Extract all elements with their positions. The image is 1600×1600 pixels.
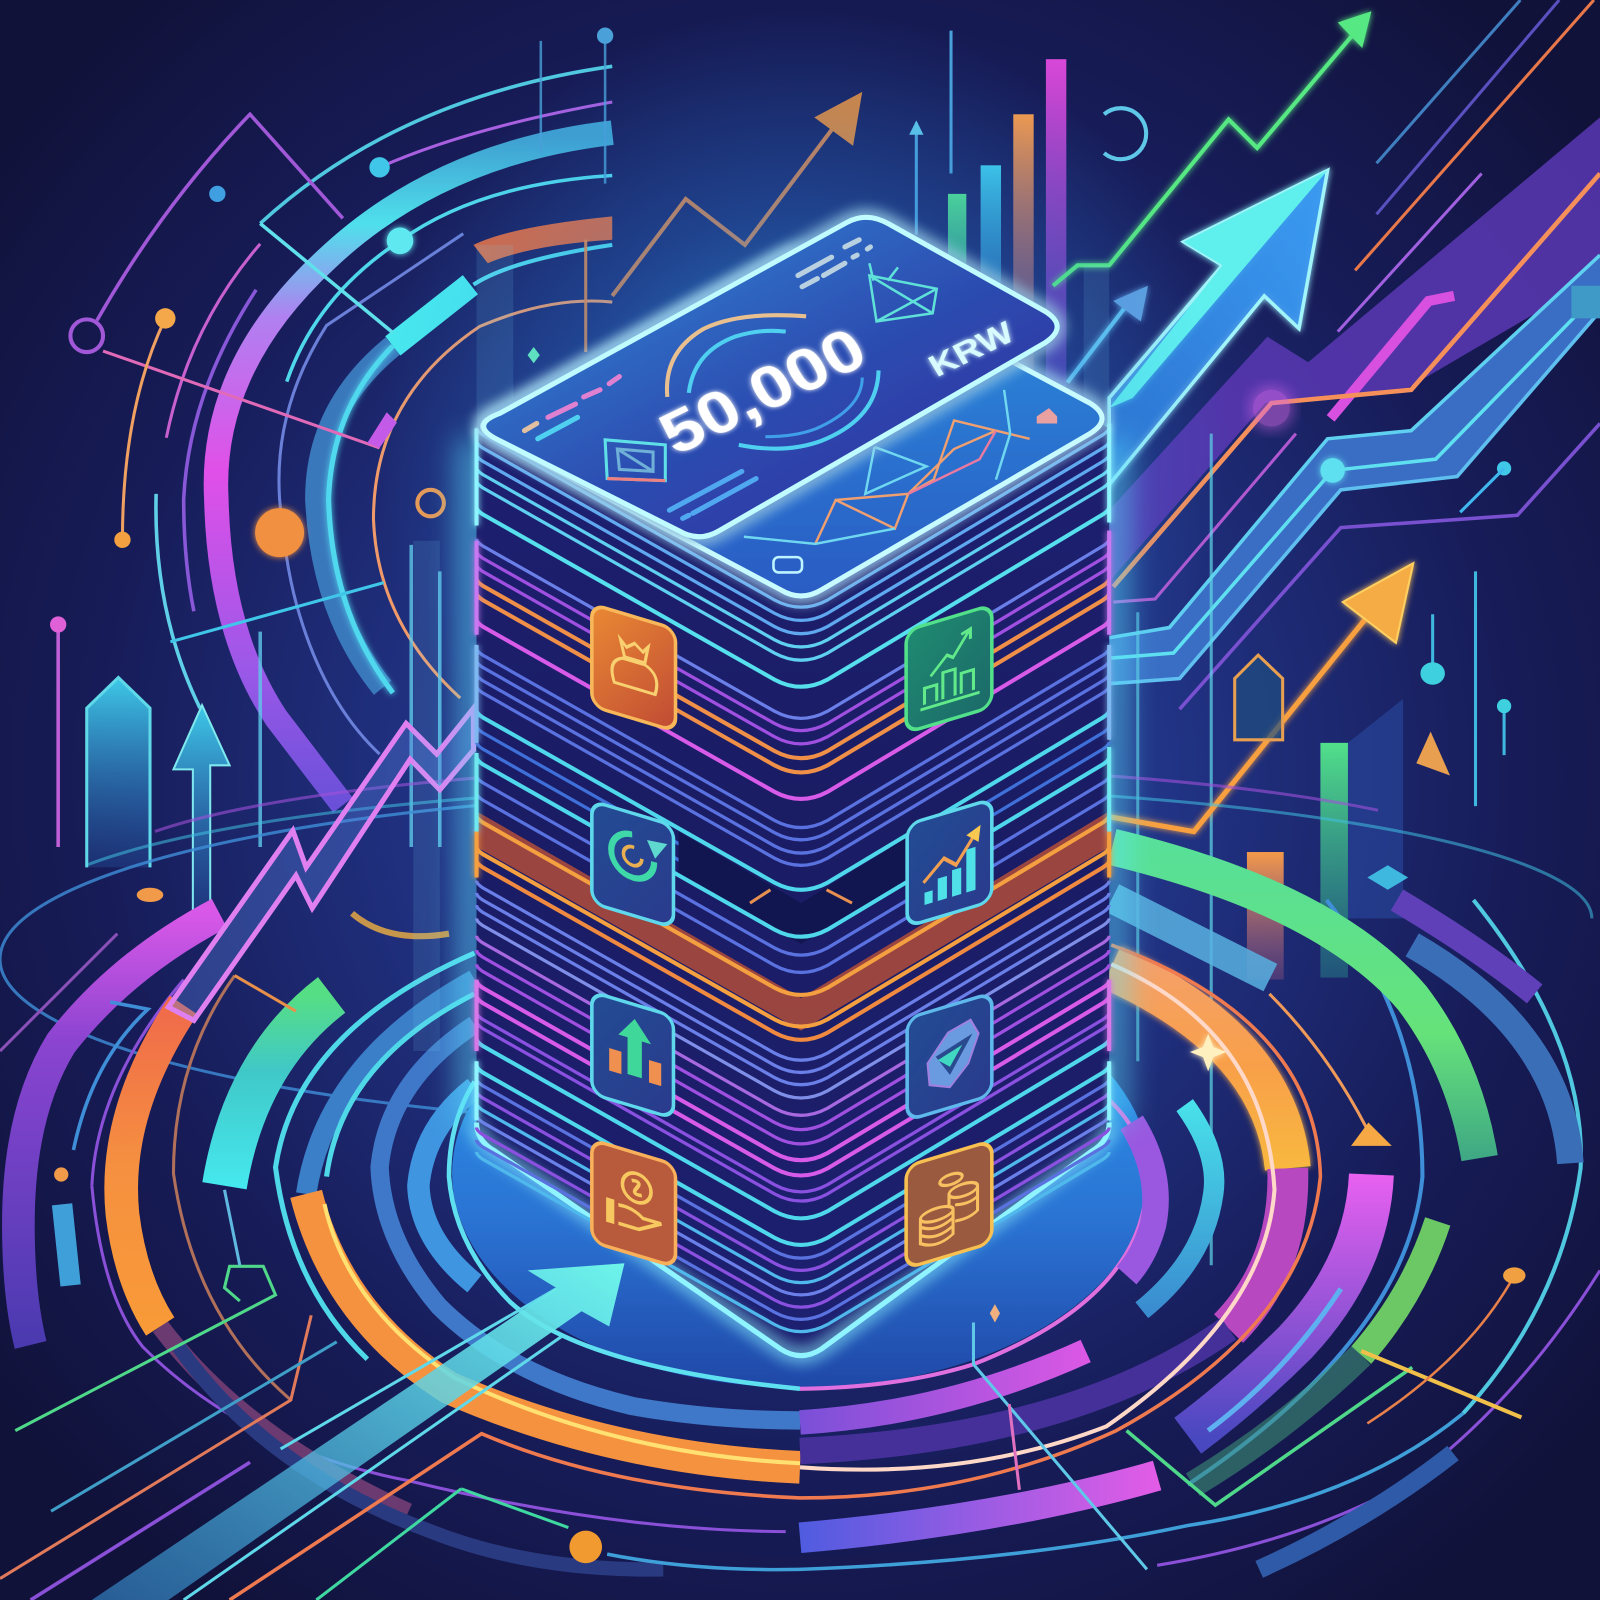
magenta big right [1188,1174,1371,1436]
icon: money bag [592,604,676,731]
bottom perspective rings [0,765,1600,1570]
left house and up arrow [87,678,230,918]
left orange arc [121,1005,184,1327]
green rising arrow [1053,11,1371,286]
stack side edges [477,423,1109,1120]
bright inner ring [449,1082,800,1389]
icon: hand with coin [592,1140,676,1267]
magenta continuation [1229,1168,1288,1329]
dark gap panel [679,832,908,944]
right diagonal bands [1109,117,1600,1265]
magenta inner ring right [800,1097,1147,1389]
icon: growth chart cloud [906,605,992,733]
small orange ticks [750,890,852,903]
floor glow [452,959,1150,1388]
left steel thick ring [306,980,474,1194]
upper right thin diagonals [1338,0,1594,332]
steel and cyan arc [316,346,393,688]
icon: line and bar chart [907,799,992,927]
left green and cyan arc [224,995,332,1186]
bottom cyan arrow [92,1263,624,1600]
red orange line [230,945,1320,1600]
orange band [477,811,1109,1031]
icon: up arrow bars [592,992,673,1118]
amount text: 50,000 [648,316,878,467]
card envelope icon [869,263,937,321]
lower deck top face [483,255,1102,596]
small sparkle [528,347,1227,1322]
big orange lower arc [306,1194,800,1467]
icon: gem [907,993,992,1120]
deck small tag [1037,408,1057,423]
card diamond icon [605,440,665,481]
left small blue hook [73,1002,148,1150]
stacked card edges [477,428,1109,1332]
purple right short [1127,1122,1156,1276]
green arc right [1112,847,1480,1158]
icon: circular arrow [592,801,673,928]
card dashes [524,240,870,518]
left purple outer arc [18,913,219,1345]
orange arrow on right [1107,563,1413,832]
tower side glow [471,439,1114,1122]
orange ring [373,301,612,698]
bottom line details [0,888,1526,1600]
tower halo [372,10,1230,867]
orange rising arrow top [586,92,862,352]
orange right arc [1111,967,1288,1168]
bottom blue magenta bar [800,1476,1157,1538]
main thick arc [216,133,612,805]
network lines [744,390,1030,544]
upper left concentric arcs [156,66,612,805]
icon: coin stacks [906,1141,992,1268]
colored thick ring segments [18,847,1480,1600]
blue wide ring [380,1024,800,1420]
currency text: KRW [923,315,1021,384]
amount ring [667,315,879,449]
tower base outline [477,1122,1109,1356]
lime arc lower [1193,1355,1361,1485]
vertical light beams [413,245,1109,1051]
orange wedge [473,216,612,263]
magenta zigzag ribbon [168,708,473,1020]
card stack tower [477,255,1109,1356]
right bars and house [1235,571,1511,980]
card body [484,217,1057,537]
lime arc upper [1361,1221,1438,1355]
pale line right [800,964,1274,1470]
purple band [1109,117,1600,582]
cyan right arc [1142,1105,1214,1310]
deck small slot [773,557,802,572]
blue inner ring [418,1088,474,1284]
purple deep band [800,1329,1229,1451]
blue inner thin right [1208,1289,1341,1431]
magenta lower bar [800,1351,1086,1422]
top bars [909,31,1146,396]
blue band [1109,255,1600,684]
top banknote card [484,217,1057,537]
large blue up arrow [1067,170,1328,485]
left cyan inner ring [327,994,474,1177]
left cyan thin ring [276,953,474,1359]
tower body [477,255,1109,1356]
yellow inner line [324,1204,800,1463]
upper left nodes and lines [50,28,613,847]
